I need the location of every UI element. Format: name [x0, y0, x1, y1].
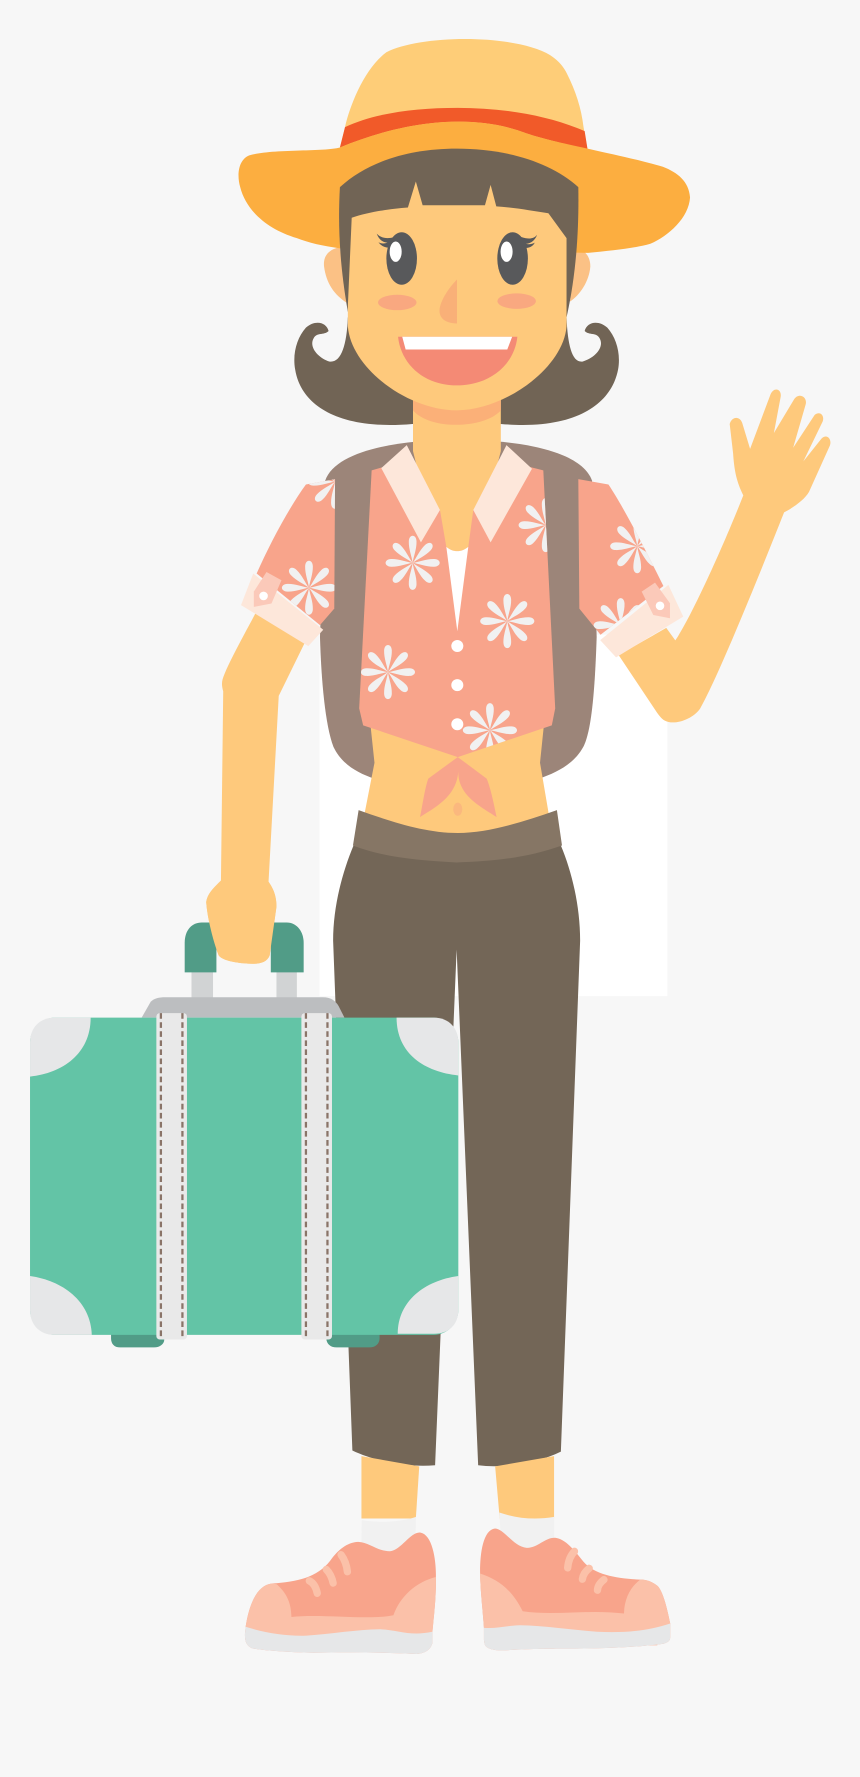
hat crown [340, 39, 588, 150]
trousers [333, 810, 580, 1466]
shirt buttons [451, 640, 463, 730]
hat brim [239, 122, 690, 253]
cheeks and nose [378, 279, 536, 324]
suitcase [30, 922, 458, 1347]
hair back curls [294, 317, 619, 425]
hand over handle [206, 881, 276, 964]
shirt [241, 455, 683, 817]
left sleeve flowers [282, 479, 335, 615]
far arm: raised waving arm [619, 390, 830, 722]
body flowers [361, 498, 548, 750]
neck [413, 385, 501, 631]
near arm: holding suitcase [206, 612, 306, 964]
collar [381, 445, 532, 542]
suitcase body [30, 1018, 458, 1335]
shirt body [359, 465, 555, 757]
bare midriff [358, 725, 555, 844]
suitcase handle [142, 922, 344, 1018]
backpack [320, 440, 597, 779]
suitcase corners [30, 1018, 458, 1335]
legs and socks [361, 1456, 554, 1558]
eyes [377, 232, 537, 285]
right sleeve flowers [594, 526, 654, 629]
shirt knot [420, 757, 497, 817]
sleeve cuffs [241, 572, 683, 657]
right sleeve [578, 479, 663, 635]
ears [324, 247, 590, 303]
left shoe [245, 1533, 436, 1654]
hat [239, 39, 690, 253]
white undershirt [446, 547, 468, 631]
hat band [340, 108, 588, 150]
left sleeve [257, 479, 335, 625]
face [348, 181, 567, 410]
hair fringe [339, 149, 578, 317]
suitcase feet [111, 1333, 380, 1347]
smile [398, 337, 517, 385]
right shoe [480, 1528, 670, 1650]
suitcase straps [156, 1013, 332, 1339]
